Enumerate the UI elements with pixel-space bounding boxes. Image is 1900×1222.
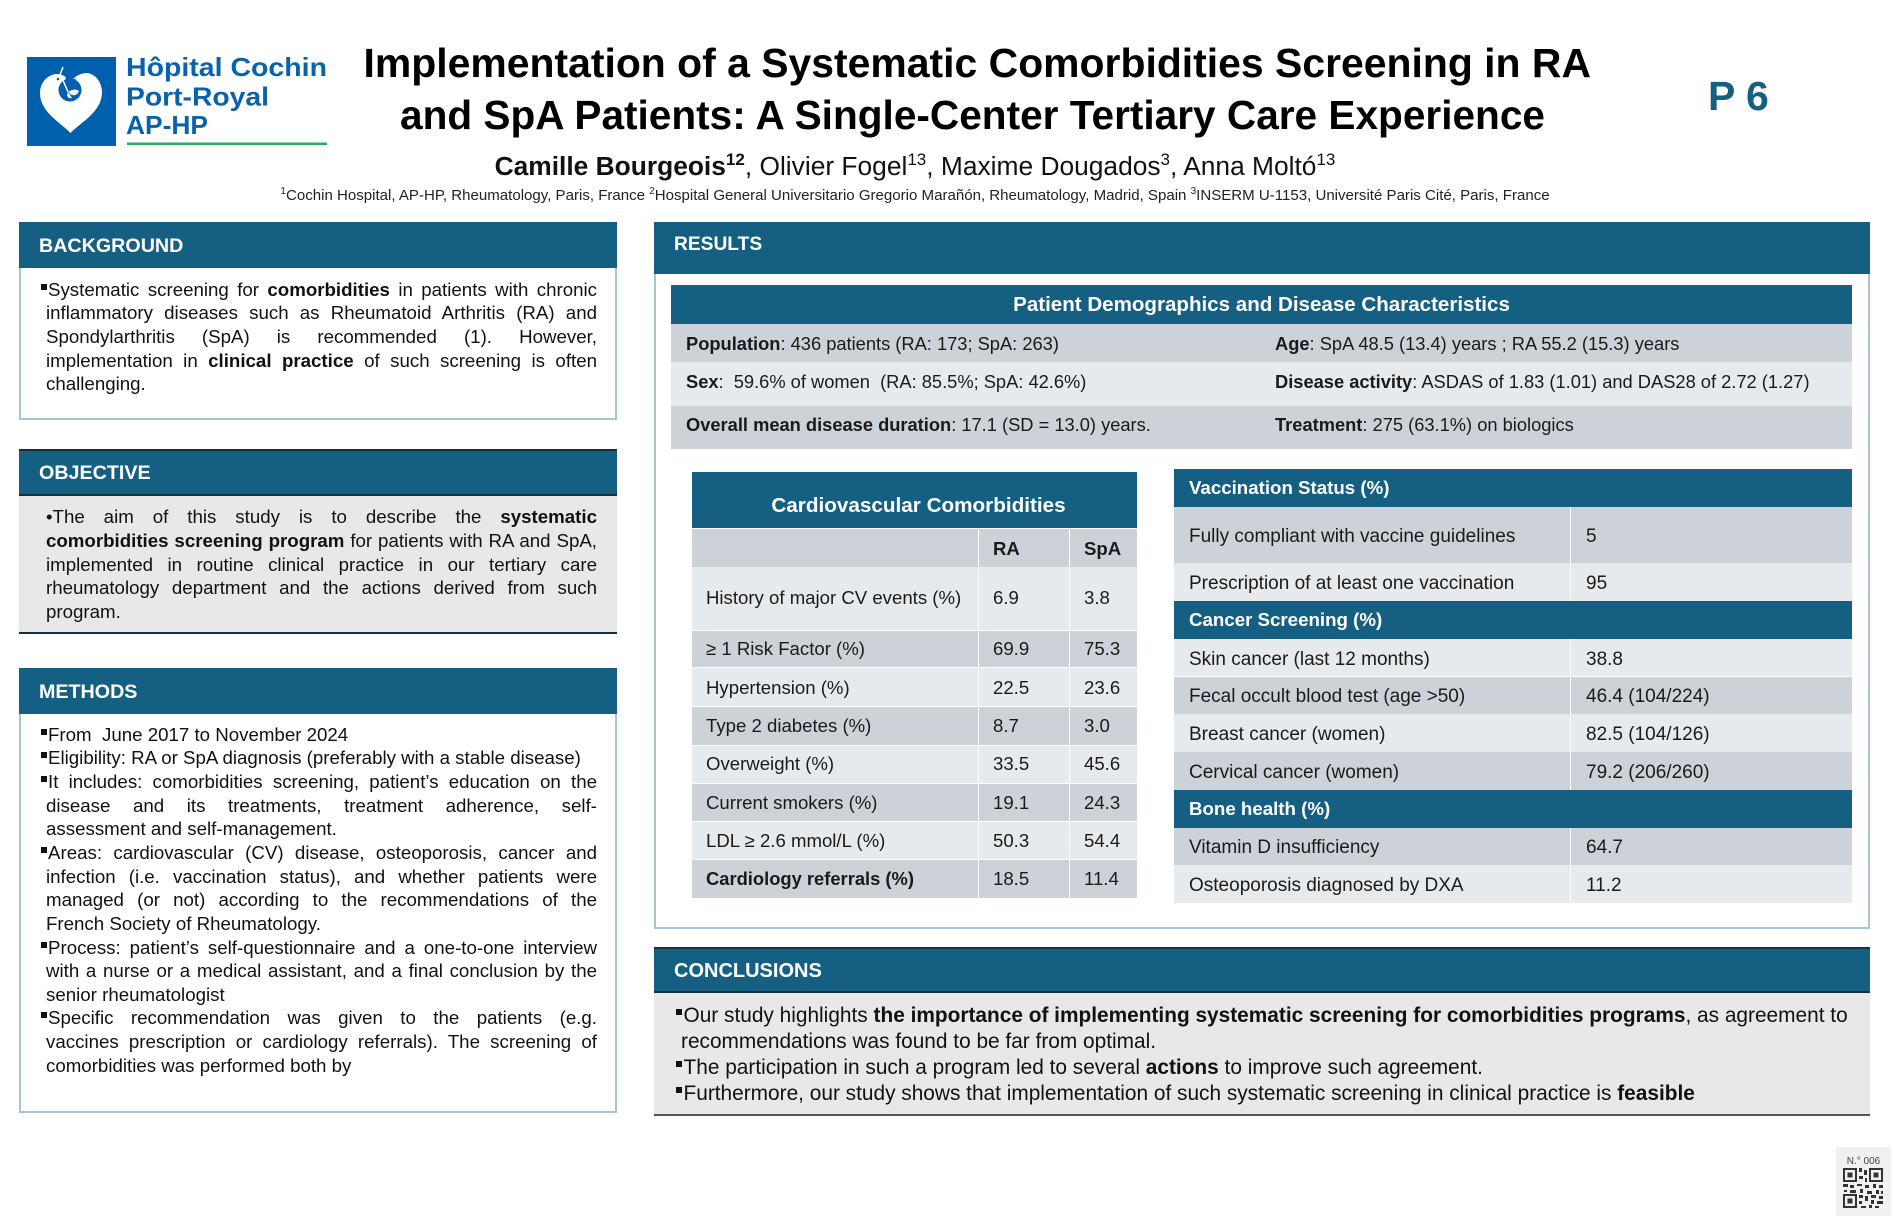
table: vaccination, cancer screening, bone health: Fecal occult blood test (age >50)	[1189, 686, 1465, 707]
text: background: Systematic screening for comorbidities in patients with chronic	[48, 279, 597, 300]
text: conclusions: Our study highlights the importance of implementing systematic screening for comorbidities programs, as agreement to	[684, 1004, 1848, 1027]
table: patient demographics: Disease activity: ASDAS of 1.83 (1.01) and DAS28 of 2.72 (1.27)	[1275, 371, 1810, 392]
table: cardiovascular comorbidities: SpA	[1084, 538, 1121, 559]
table: vaccination, cancer screening, bone health: Osteoporosis diagnosed by DXA	[1189, 875, 1464, 896]
table: vaccination, cancer screening, bone health: Vitamin D insufficiency	[1189, 837, 1379, 858]
heading: cardiovascular comorbidities	[692, 472, 1137, 528]
text: background: inflammatory diseases such as Rheumatoid Arthritis (RA) and	[46, 302, 597, 323]
text: objective	[46, 506, 597, 622]
text: methods: assessment and self-management.	[46, 818, 337, 839]
table: vaccination, cancer screening, bone health: Cervical cancer (women)	[1189, 762, 1399, 783]
table: cardiovascular comorbidities: 50.3	[993, 830, 1029, 851]
table: patient demographics: Population: 436 patients (RA: 173; SpA: 263)	[686, 333, 1059, 354]
table: patient demographics: Overall mean disease duration: 17.1 (SD = 13.0) years.	[686, 414, 1151, 435]
text: methods: with a nurse or a medical assistant, and a final conclusion by the	[46, 960, 597, 981]
poster number P 6: P 6	[1708, 73, 1769, 119]
table: cardiovascular comorbidities: RA	[993, 538, 1020, 559]
table: cardiovascular comorbidities: 11.4	[1084, 868, 1119, 889]
table: cardiovascular comorbidities: 19.1	[993, 792, 1029, 813]
table: vaccination, cancer screening, bone health: 11.2	[1586, 875, 1622, 896]
logo: Hôpital Cochin Port-Royal AP-HP: Hôpital Cochin	[126, 52, 327, 82]
table: vaccination, cancer screening, bone health: 64.7	[1586, 837, 1623, 858]
table: vaccination, cancer screening, bone health: 5	[1586, 526, 1597, 547]
table: cardiovascular comorbidities: 8.7	[993, 715, 1019, 736]
panel: results	[654, 222, 1870, 929]
table: cardiovascular comorbidities: 23.6	[1084, 677, 1120, 698]
table: cardiovascular comorbidities: 6.9	[993, 587, 1019, 608]
table: vaccination, cancer screening, bone health: 95	[1586, 573, 1607, 594]
table: cardiovascular comorbidities: History of major CV events (%)	[706, 587, 961, 608]
table: patient demographics: Age: SpA 48.5 (13.4) years ; RA 55.2 (15.3) years	[1275, 333, 1679, 354]
panel: conclusions	[654, 947, 1870, 1116]
table: cardiovascular comorbidities: Hypertension (%)	[706, 677, 850, 698]
text: conclusions	[676, 1004, 1848, 1105]
text: objective: comorbidities screening program for patients with RA and SpA,	[46, 530, 597, 551]
text: background: challenging.	[46, 373, 146, 394]
heading: conclusions	[654, 949, 1870, 993]
table: cardiovascular comorbidities: Current smokers (%)	[706, 792, 878, 813]
table: cardiovascular comorbidities: 18.5	[993, 868, 1029, 889]
table: cardiovascular comorbidities: Overweight (%)	[706, 753, 834, 774]
text: conclusions: recommendations was found to be far from optimal.	[681, 1030, 1156, 1053]
table: vaccination, cancer screening, bone health: 82.5 (104/126)	[1586, 724, 1710, 745]
heading: demographics	[671, 285, 1852, 324]
heading: vaccination status: Vaccination Status (%)	[1189, 477, 1389, 498]
heading: cancer screening	[1174, 601, 1852, 639]
text: methods: senior rheumatologist	[46, 984, 225, 1005]
table: vaccination, cancer screening, bone health: 46.4 (104/224)	[1586, 686, 1710, 707]
heading: methods	[19, 668, 617, 714]
heading: cancer screening: Cancer Screening (%)	[1189, 609, 1382, 630]
logo: Hôpital Cochin Port-Royal AP-HP: Port-Royal	[126, 82, 269, 112]
table: cardiovascular comorbidities: 75.3	[1084, 638, 1120, 659]
text: methods: Eligibility: RA or SpA diagnosis (preferably with a stable disease)	[48, 747, 581, 768]
title	[364, 40, 1591, 138]
table: cardiovascular comorbidities: Type 2 diabetes (%)	[706, 715, 871, 736]
table: cardiovascular comorbidities: 24.3	[1084, 792, 1120, 813]
table: cardiovascular comorbidities: 33.5	[993, 753, 1029, 774]
table: vaccination, cancer screening, bone health: Breast cancer (women)	[1189, 724, 1385, 745]
table: cardiovascular comorbidities: 69.9	[993, 638, 1029, 659]
affiliations: 1Cochin Hospital, AP-HP, Rheumatology, Paris, France 2Hospital General Universitario Gregorio Marañón, Rheumatology, Madrid, Spain 3INSERM U-1153, Université Paris Cité, Paris, France	[280, 185, 1550, 204]
title: and SpA Patients: A Single-Center Tertiary Care Experience	[400, 92, 1545, 138]
heading: objective	[19, 451, 617, 496]
text: methods: managed (or not) according to the recommendations of the	[46, 889, 597, 910]
table: patient demographics: Treatment: 275 (63.1%) on biologics	[1275, 414, 1574, 435]
heading: results	[654, 222, 1870, 274]
heading: background: BACKGROUND	[39, 234, 183, 256]
heading: objective: OBJECTIVE	[39, 462, 151, 484]
text: objective: implemented in routine clinical practice in our tertiary care	[46, 554, 597, 575]
logo: Hôpital Cochin Port-Royal AP-HP	[27, 52, 327, 146]
text: background: Spondylarthritis (SpA) is recommended (1). However,	[46, 326, 597, 347]
heading: results: RESULTS	[674, 234, 762, 255]
heading: background	[19, 222, 617, 268]
heading: bone health	[1174, 790, 1852, 828]
table: vaccination, cancer screening, bone health: Prescription of at least one vaccination	[1189, 573, 1514, 594]
panel: objective	[19, 449, 617, 634]
text: methods: It includes: comorbidities screening, patient’s education on the	[48, 771, 597, 792]
text: conclusions: The participation in such a program led to several actions to improve such agreement.	[684, 1056, 1483, 1079]
text: methods: Areas: cardiovascular (CV) disease, osteoporosis, cancer and	[48, 842, 597, 863]
table: vaccination, cancer screening, bone health: 79.2 (206/260)	[1586, 762, 1710, 783]
table: cardiovascular comorbidities: 54.4	[1084, 830, 1120, 851]
text: methods: comorbidities was performed both by	[46, 1055, 351, 1076]
table: vaccination, cancer screening, bone health	[1174, 469, 1852, 903]
panel: methods	[19, 668, 617, 1112]
panel: background	[19, 222, 617, 420]
table: cardiovascular comorbidities: 3.0	[1084, 715, 1110, 736]
heading: cardiovascular comorbidities: Cardiovascular Comorbidities	[771, 494, 1066, 516]
text: objective: •The aim of this study is to describe the systematic	[46, 506, 597, 527]
table: cardiovascular comorbidities: 3.8	[1084, 587, 1110, 608]
table: cardiovascular comorbidities: LDL ≥ 2.6 mmol/L (%)	[706, 830, 885, 851]
QR code badge	[1836, 1147, 1891, 1216]
text: methods: French Society of Rheumatology.	[46, 913, 321, 934]
heading: bone health: Bone health (%)	[1189, 798, 1330, 819]
text: objective: rheumatology department and the actions derived from such	[46, 577, 597, 598]
table: cardiovascular comorbidities: 45.6	[1084, 753, 1120, 774]
table: vaccination, cancer screening, bone health: Fully compliant with vaccine guidelines	[1189, 526, 1515, 547]
logo: Hôpital Cochin Port-Royal AP-HP: AP-HP	[126, 110, 208, 140]
table: patient demographics: Sex: 59.6% of women (RA: 85.5%; SpA: 42.6%)	[686, 371, 1086, 392]
text: background	[41, 279, 597, 394]
text: methods: Process: patient’s self-questionnaire and a one-to-one interview	[48, 937, 597, 958]
text: objective: program.	[46, 601, 121, 622]
table: patient demographics	[671, 285, 1852, 449]
heading: methods: METHODS	[39, 680, 137, 702]
table: cardiovascular comorbidities	[692, 472, 1137, 898]
text: methods: From June 2017 to November 2024	[48, 724, 348, 745]
authors: Camille Bourgeois12, Olivier Fogel13, Maxime Dougados3, Anna Moltó13	[495, 150, 1335, 181]
text: conclusions: Furthermore, our study shows that implementation of such systematic screening in clinical practice is feasible	[684, 1082, 1695, 1105]
table: cardiovascular comorbidities: ≥ 1 Risk Factor (%)	[706, 638, 865, 659]
table: cardiovascular comorbidities: 22.5	[993, 677, 1029, 698]
heading: conclusions: CONCLUSIONS	[674, 960, 822, 982]
text: methods	[41, 724, 597, 1076]
text: methods: disease and its treatments, treatment adherence, self-	[46, 795, 597, 816]
text: methods: infection (i.e. vaccination status), and whether patients were	[46, 866, 597, 887]
heading: demographics: Patient Demographics and Disease Characteristics	[1013, 292, 1510, 316]
text: methods: Specific recommendation was given to the patients (e.g.	[48, 1007, 597, 1028]
heading: vaccination status	[1174, 469, 1852, 506]
text: background: implementation in clinical practice of such screening is often	[46, 350, 597, 371]
title: Implementation of a Systematic Comorbidities Screening in RA	[364, 40, 1591, 86]
text: methods: vaccines prescription or cardiology referrals). The screening of	[46, 1031, 597, 1052]
QR code badge: N.° 006	[1847, 1156, 1881, 1167]
table: vaccination, cancer screening, bone health: 38.8	[1586, 649, 1623, 670]
table: vaccination, cancer screening, bone health: Skin cancer (last 12 months)	[1189, 649, 1430, 670]
table: cardiovascular comorbidities: Cardiology referrals (%)	[706, 868, 914, 889]
